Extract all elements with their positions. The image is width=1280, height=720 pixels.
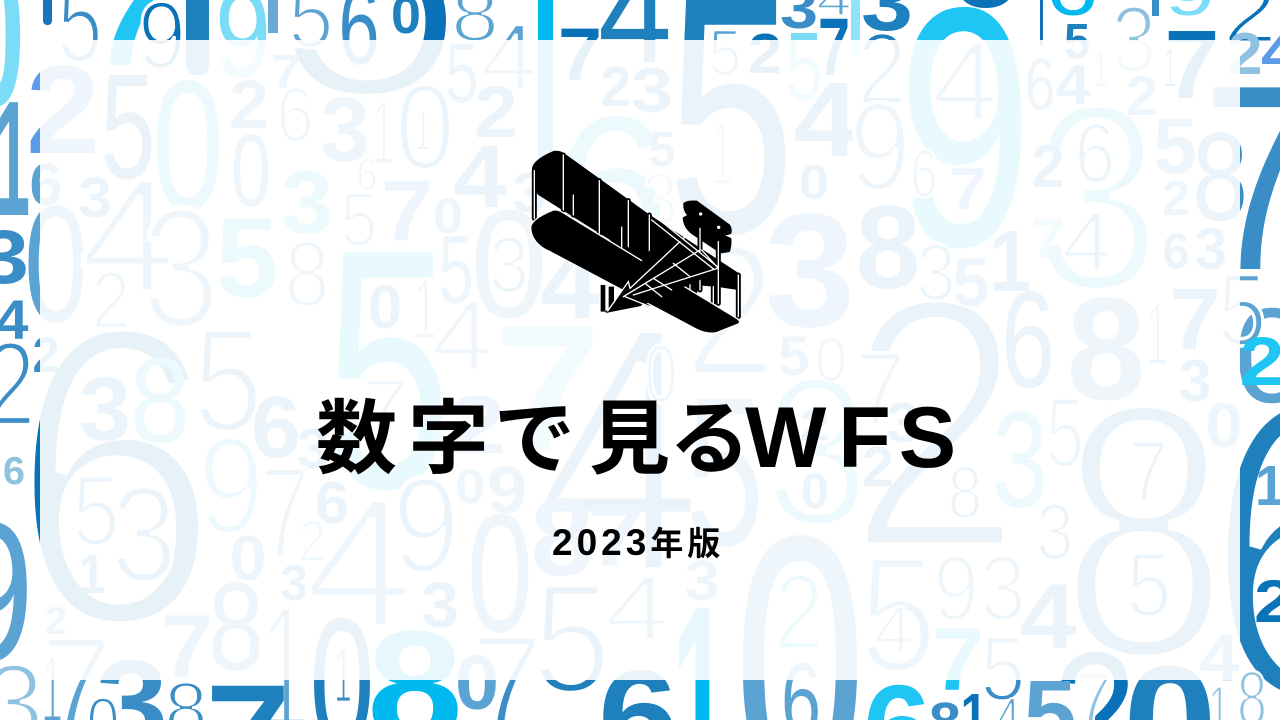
interior numerals lower left: 9 [198,409,264,563]
interior numerals lower right: 4 [1199,620,1239,694]
interior numerals lower right: 5 [778,324,810,387]
interior numerals upper left: 1 [414,261,436,358]
large numerals: 5 [324,179,452,560]
top band numerals: 5 [446,26,478,121]
interior numerals upper right: 6 [1162,223,1190,279]
interior numerals lower left: 7 [260,439,310,585]
interior numerals upper left: 3 [78,166,112,230]
interior numerals lower left: 3 [421,569,459,641]
interior numerals lower left: 3 [684,549,720,613]
top band numerals: 7 [558,13,602,96]
interior numerals upper right: 4 [1056,53,1091,117]
large numerals: 5 [686,353,764,591]
interior numerals upper right: 3 [642,157,678,241]
interior numerals upper right: 4 [932,19,998,146]
interior numerals upper left: 0 [231,113,271,228]
interior numerals lower right: 9 [933,536,979,640]
interior numerals upper right: 2 [1032,133,1064,200]
interior numerals upper left: 7 [381,163,433,259]
interior numerals upper right: 4 [794,61,859,179]
interior numerals upper right: 8 [1066,267,1146,430]
interior numerals lower left: 3 [111,458,177,610]
title: 数字で見るWFS [316,374,956,491]
interior numerals upper right: 8 [856,181,920,314]
interior numerals lower left: 9 [392,449,460,601]
interior numerals upper left: 6 [276,70,314,158]
interior numerals upper right: 5 [648,123,676,177]
top band numerals: 5 [708,16,742,89]
interior numerals upper right: 3 [631,56,673,126]
interior numerals upper right: 6 [910,136,938,212]
top band numerals [43,0,1280,160]
interior numerals upper left: 0 [368,273,402,341]
interior numerals upper left: 0 [470,178,548,350]
large numerals: 2 [847,223,1023,625]
top band numerals: 4 [480,5,538,111]
interior numerals lower right: 3 [1036,487,1074,576]
interior numerals lower left: 5 [193,298,263,463]
interior numerals lower right: 3 [980,536,1026,640]
interior numerals upper right: 1 [1146,285,1168,385]
interior numerals lower left: 0 [230,522,266,594]
interior numerals upper left: 2 [92,256,130,346]
interior numerals upper right: 6 [1025,43,1055,126]
interior numerals lower right: 3 [886,391,920,455]
interior numerals lower right: 2 [774,551,824,672]
top band numerals: 7 [1164,10,1220,119]
interior numerals lower left [45,298,720,720]
interior numerals lower right: 4 [1020,566,1076,668]
interior numerals upper right: 1 [1164,36,1176,99]
interior numerals upper left: 4 [432,280,492,392]
interior numerals lower right: 7 [854,331,906,448]
interior numerals upper left: 2 [474,72,518,153]
interior numerals upper right: 6 [1074,106,1116,200]
wing struts [534,155,738,317]
large numerals: 6 [555,74,669,304]
interior numerals upper left: 5 [438,215,474,324]
interior numerals lower left: 7 [361,366,409,446]
interior numerals upper right: 8 [1192,108,1248,247]
interior numerals upper right: 4 [1062,195,1112,288]
interior numerals lower right: 8 [948,451,982,534]
interior numerals lower right: 5 [859,522,937,706]
large numerals: 6 [9,236,221,715]
large numerals: 3 [1032,47,1162,347]
interior numerals upper right: 7 [1032,207,1064,271]
interior numerals upper left: 0 [395,59,455,195]
interior numerals lower right: 7 [1128,424,1168,520]
interior numerals upper left: 3 [320,79,370,181]
left band numerals: 6 [30,151,62,218]
interior numerals upper left: 8 [284,222,330,326]
large numerals: 3 [765,333,869,571]
interior numerals upper left: 3 [489,220,529,309]
top band numerals: 5 [786,12,822,121]
interior numerals lower right: 5 [1046,377,1084,489]
rudder bars [601,285,614,312]
interior numerals upper right: 2 [1240,323,1280,400]
interior numerals upper left: 3 [512,161,546,225]
interior numerals upper left: 4 [80,144,176,327]
interior numerals lower left: 9 [487,453,527,528]
interior numerals lower left: 6 [251,379,301,476]
interior numerals lower left: 8 [208,558,264,697]
interior numerals upper left [78,42,600,392]
interior numerals lower left: 0 [467,479,533,667]
interior numerals upper right: 7 [1170,271,1220,368]
interior numerals upper left: 2 [229,66,269,143]
interior numerals lower right: 0 [1206,391,1242,461]
interior numerals upper right: 5 [1153,101,1197,190]
interior numerals upper left: 5 [216,195,278,322]
interior numerals lower left: 8 [530,476,594,599]
interior numerals upper left: 1 [372,82,394,184]
large numerals: 2 [684,205,776,415]
interior numerals lower left: 3 [79,360,131,460]
left band numerals: 6 [3,450,25,493]
subtitle: edition year: 2023年版 [552,517,724,565]
interior numerals upper left: 0 [433,188,463,244]
interior numerals upper left: 4 [453,126,508,226]
bottom band numerals [40,454,1280,720]
interior numerals lower left: 0 [455,460,485,514]
bottom band numerals: 5 [980,618,1026,720]
top band numerals: 2 [600,55,632,119]
interior numerals lower left: 2 [45,600,67,643]
interior numerals upper right: 5 [952,244,990,321]
top band numerals: 2 [1228,21,1262,87]
interior numerals lower left: 2 [448,378,506,471]
interior numerals lower left: 6 [315,470,349,536]
top band numerals: 7 [818,2,850,93]
centre truss and nose [607,215,718,312]
interior numerals upper right: 2 [1162,172,1190,226]
large numerals: 7 [495,288,601,489]
interior numerals lower right: 0 [801,463,829,519]
interior numerals upper left: 7 [271,45,301,98]
left band numerals: 2 [32,327,60,383]
interior numerals lower left: 4 [604,556,670,660]
interior numerals lower left: 7 [588,488,644,584]
interior numerals lower right [644,324,1242,706]
top band numerals: 2 [858,12,906,126]
interior numerals upper right [631,19,1280,430]
interior numerals upper right: 0 [799,156,829,210]
interior numerals lower left: 1 [78,542,106,605]
interior numerals lower right: 5 [1126,534,1172,636]
interior numerals upper left: 4 [540,228,600,340]
interior numerals lower right: 0 [815,326,847,395]
interior numerals upper right: 9 [849,78,911,217]
interior numerals upper left: 6 [356,149,378,200]
interior numerals upper right: 1 [989,213,1031,310]
interior numerals lower left: 3 [297,417,329,481]
interior numerals upper right: 3 [764,180,856,361]
top band numerals: 5 [1064,15,1090,69]
interior numerals upper right: 1 [710,103,734,205]
left band numerals: 2 [26,39,100,180]
left band numerals [0,39,100,720]
interior numerals upper right: 3 [1178,348,1212,414]
bottom band numerals: 7 [932,609,984,709]
interior numerals lower left: 4 [304,460,414,667]
interior numerals lower left: 2 [298,509,326,574]
interior numerals upper right: 1 [1094,42,1108,98]
left band numerals: 0 [24,172,88,357]
bottom band numerals: 1 [334,631,352,719]
interior numerals lower right: 2 [862,435,894,499]
interior numerals lower right: 0 [644,327,678,420]
interior numerals lower left: 7 [161,596,213,696]
large numerals: 4 [536,250,704,649]
interior numerals upper left: 3 [281,152,333,252]
interior numerals upper right: 7 [950,156,986,222]
interior numerals upper right: 5 [1218,253,1266,367]
interior numerals lower left: 8 [130,332,190,468]
interior numerals upper right: 2 [1126,64,1158,127]
interior numerals upper left: 5 [340,177,378,263]
interior numerals upper left: 0 [152,43,224,249]
interior numerals lower left: 5 [72,455,120,567]
interior numerals lower right: 2 [800,402,830,450]
interior numerals upper right: 3 [1195,216,1227,282]
lower wing [531,210,740,333]
interior numerals lower left: 3 [280,555,308,611]
interior numerals upper right: 6 [1001,263,1055,417]
interior numerals upper left: 1 [416,99,430,163]
interior numerals upper right: 3 [916,228,956,318]
interior numerals upper left: 3 [142,173,220,364]
interior numerals lower right: 3 [992,384,1048,537]
interior numerals lower right: 4 [874,592,912,668]
interior numerals upper left: 5 [100,42,156,210]
top band numerals: 2 [748,22,782,86]
upper wing [532,151,740,307]
rear elevator surfaces [683,201,731,253]
